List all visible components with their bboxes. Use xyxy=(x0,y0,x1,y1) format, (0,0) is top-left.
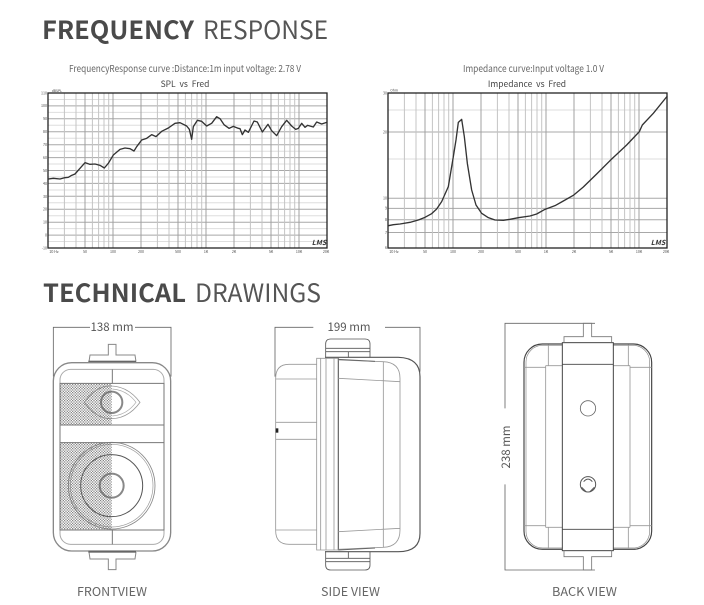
impedance curve xyxy=(388,96,667,226)
y axis labels xyxy=(41,88,62,252)
tweeter xyxy=(84,386,140,419)
top bracket xyxy=(564,323,612,343)
dimension lines: width xyxy=(53,327,171,377)
side view drawing xyxy=(275,327,420,570)
x axis labels: 1K xyxy=(544,250,549,255)
heading: frequency response: FREQUENCY xyxy=(42,11,194,47)
speaker body outline xyxy=(53,363,171,551)
y axis labels: 50 xyxy=(43,169,47,174)
view captions xyxy=(77,583,617,600)
chart title: SPL vs Fred: SPL vs Fred xyxy=(161,78,209,90)
grille panel lines xyxy=(60,369,164,544)
back view drawing xyxy=(505,323,652,570)
x axis labels: 200 xyxy=(138,250,144,255)
y axis labels: 10 xyxy=(43,220,47,226)
centre column xyxy=(317,358,338,550)
y axis labels: 70 xyxy=(43,143,47,148)
y axis labels: 0 xyxy=(45,234,47,238)
y axis labels xyxy=(383,88,398,251)
x axis labels: 10K xyxy=(636,250,643,255)
grille dot texture xyxy=(60,383,112,530)
front view drawing xyxy=(53,327,171,570)
LMS logo: LMS xyxy=(651,238,667,248)
heading: technical drawings: DRAWINGS xyxy=(195,274,321,310)
x axis labels: 50 xyxy=(423,250,427,255)
y axis labels: -10 xyxy=(42,246,47,252)
x axis labels: 500 xyxy=(515,250,521,255)
top cap xyxy=(326,339,370,358)
body detail lines xyxy=(524,345,652,549)
centre mounting plate xyxy=(562,343,613,551)
speaker body xyxy=(524,344,652,549)
chart caption: impedance: Impedance curve:Input voltage 1.0 V xyxy=(463,61,604,75)
y axis labels: 7 xyxy=(385,231,387,236)
bottom cap xyxy=(326,552,370,570)
chart caption: frequency response: FrequencyResponse curve :Distance:1m input voltage: 2.78 V xyxy=(69,61,301,75)
x axis labels: 100 xyxy=(450,250,456,255)
bottom mounting bracket xyxy=(89,552,136,570)
front dimension label: 138 mm xyxy=(90,319,134,335)
heading: technical drawings xyxy=(43,274,321,310)
front baffle xyxy=(338,360,400,549)
frequency response chart xyxy=(41,61,330,255)
rear connector mark xyxy=(276,428,278,433)
x axis labels: 5K xyxy=(269,250,274,255)
lower mounting hole xyxy=(580,477,596,492)
view captions: BACK VIEW xyxy=(552,583,617,600)
bottom bracket xyxy=(564,551,612,570)
y axis labels: 20 xyxy=(43,208,47,212)
x axis labels: 20 Hz xyxy=(49,250,59,255)
view captions: SIDE VIEW xyxy=(321,583,380,600)
x axis labels xyxy=(49,250,330,255)
view captions: FRONTVIEW xyxy=(77,583,147,600)
x axis labels: 20 Hz xyxy=(389,250,399,255)
y axis labels: 8 xyxy=(385,218,387,223)
dimension lines: depth xyxy=(275,327,420,377)
top mounting bracket xyxy=(89,344,136,362)
x axis labels: 2K xyxy=(232,250,237,255)
x axis labels: 50 xyxy=(83,250,87,255)
x axis labels: 500 xyxy=(175,250,181,255)
rear housing xyxy=(276,364,317,544)
x axis labels: 5K xyxy=(609,250,614,255)
LMS logo: LMS xyxy=(312,238,328,248)
SPL curve xyxy=(48,117,327,179)
y axis labels: dBSPL xyxy=(52,88,62,93)
y axis labels: 30 xyxy=(43,195,47,200)
x axis labels: 1K xyxy=(204,250,209,255)
y axis labels: 20 xyxy=(383,130,387,136)
y axis labels: 90 xyxy=(43,117,47,122)
y axis labels: 6 xyxy=(385,246,387,251)
outer wall bracket xyxy=(325,357,420,552)
chart title: Impedance vs Fred: Impedance vs Fred xyxy=(488,78,566,90)
impedance chart xyxy=(383,61,670,255)
x axis labels: 10K xyxy=(296,250,303,255)
y axis labels: 110 xyxy=(41,92,47,96)
x axis labels: 100 xyxy=(110,250,116,255)
y axis labels: 40 xyxy=(43,182,47,187)
y axis labels: 80 xyxy=(43,130,47,135)
dimension lines: height xyxy=(505,323,595,570)
x axis labels: 2K xyxy=(572,250,577,255)
heading: technical drawings: TECHNICAL xyxy=(43,274,186,310)
x axis labels: 20K xyxy=(663,250,670,255)
side dimension label: 199 mm xyxy=(327,319,371,335)
y axis labels: 9 xyxy=(385,206,387,212)
y axis labels: 100 xyxy=(41,104,47,109)
x axis labels: 20K xyxy=(323,250,330,255)
heading: frequency response xyxy=(42,11,328,47)
y axis labels: 10 xyxy=(383,196,387,202)
heading: frequency response: RESPONSE xyxy=(203,11,328,47)
y axis labels: Ohm xyxy=(390,88,398,92)
x axis labels xyxy=(389,250,670,255)
y axis labels: 60 xyxy=(43,156,47,161)
upper mounting hole xyxy=(580,401,596,416)
x axis labels: 200 xyxy=(478,250,484,255)
woofer xyxy=(68,442,155,529)
y axis labels: 30 xyxy=(383,92,387,96)
back dimension label: 238 mm xyxy=(498,425,514,469)
